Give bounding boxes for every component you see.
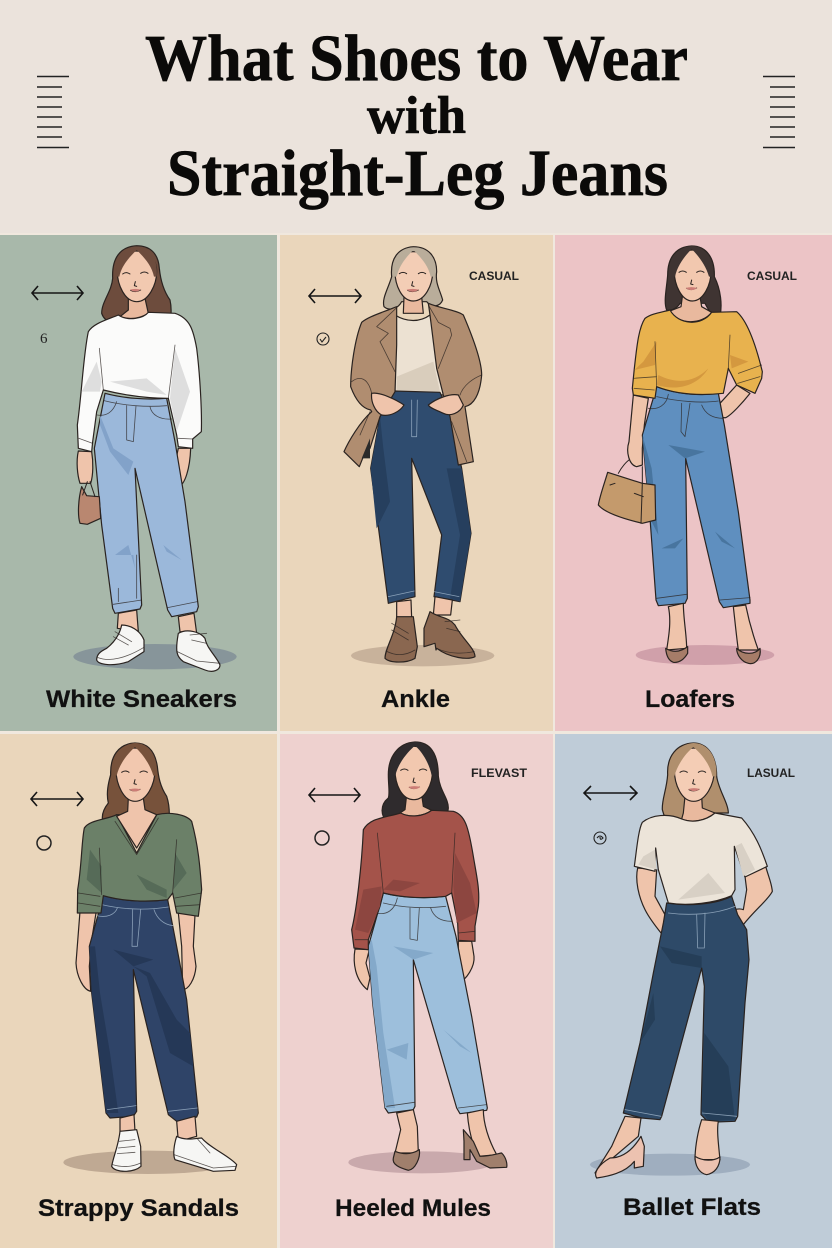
circle icon bbox=[37, 836, 51, 850]
small icon glyph: 6 bbox=[40, 331, 48, 347]
arrow bbox=[309, 788, 360, 802]
label: Heeled Mules bbox=[335, 1195, 491, 1222]
arrow bbox=[31, 792, 83, 806]
tag: CASUAL bbox=[469, 269, 519, 283]
arrow bbox=[584, 786, 637, 800]
tag: FLEVAST bbox=[471, 766, 528, 780]
panel: strappy sandals bbox=[0, 734, 277, 1248]
swirl icon bbox=[594, 832, 606, 844]
panel: loafers bbox=[555, 235, 832, 731]
circle icon bbox=[315, 831, 329, 845]
figure: woman in green sweater and navy jeans bbox=[63, 743, 237, 1174]
right ruler decoration bbox=[763, 76, 795, 148]
tag: LASUAL bbox=[747, 766, 795, 780]
title: Straight-Leg Jeans bbox=[167, 137, 668, 210]
title bbox=[145, 22, 688, 210]
arrow bbox=[32, 286, 83, 300]
title: with bbox=[367, 87, 466, 145]
header panel bbox=[0, 0, 832, 233]
figure: woman in cream tee and navy wide jeans bbox=[590, 743, 772, 1178]
check icon bbox=[317, 333, 329, 345]
panel: ballet flats bbox=[555, 734, 832, 1248]
panel: white sneakers bbox=[0, 235, 277, 731]
panel: heeled mules bbox=[280, 734, 553, 1248]
arrow bbox=[309, 289, 361, 303]
left ruler decoration bbox=[37, 76, 69, 148]
label: Ballet Flats bbox=[623, 1194, 761, 1221]
label: White Sneakers bbox=[46, 686, 237, 713]
title: What Shoes to Wear bbox=[145, 22, 688, 95]
label: Strappy Sandals bbox=[38, 1195, 239, 1222]
figure: woman in yellow sweater and mid-blue jeans bbox=[598, 246, 774, 665]
panel: ankle boots bbox=[280, 235, 553, 731]
label: Loafers bbox=[645, 686, 735, 713]
tag: CASUAL bbox=[747, 269, 797, 283]
label: Ankle bbox=[381, 686, 450, 713]
figure: woman in white sweater and light jeans bbox=[73, 246, 237, 671]
figure: woman in red sweater and light jeans bbox=[348, 742, 507, 1173]
figure: woman in tan blazer and navy jeans bbox=[344, 247, 494, 666]
